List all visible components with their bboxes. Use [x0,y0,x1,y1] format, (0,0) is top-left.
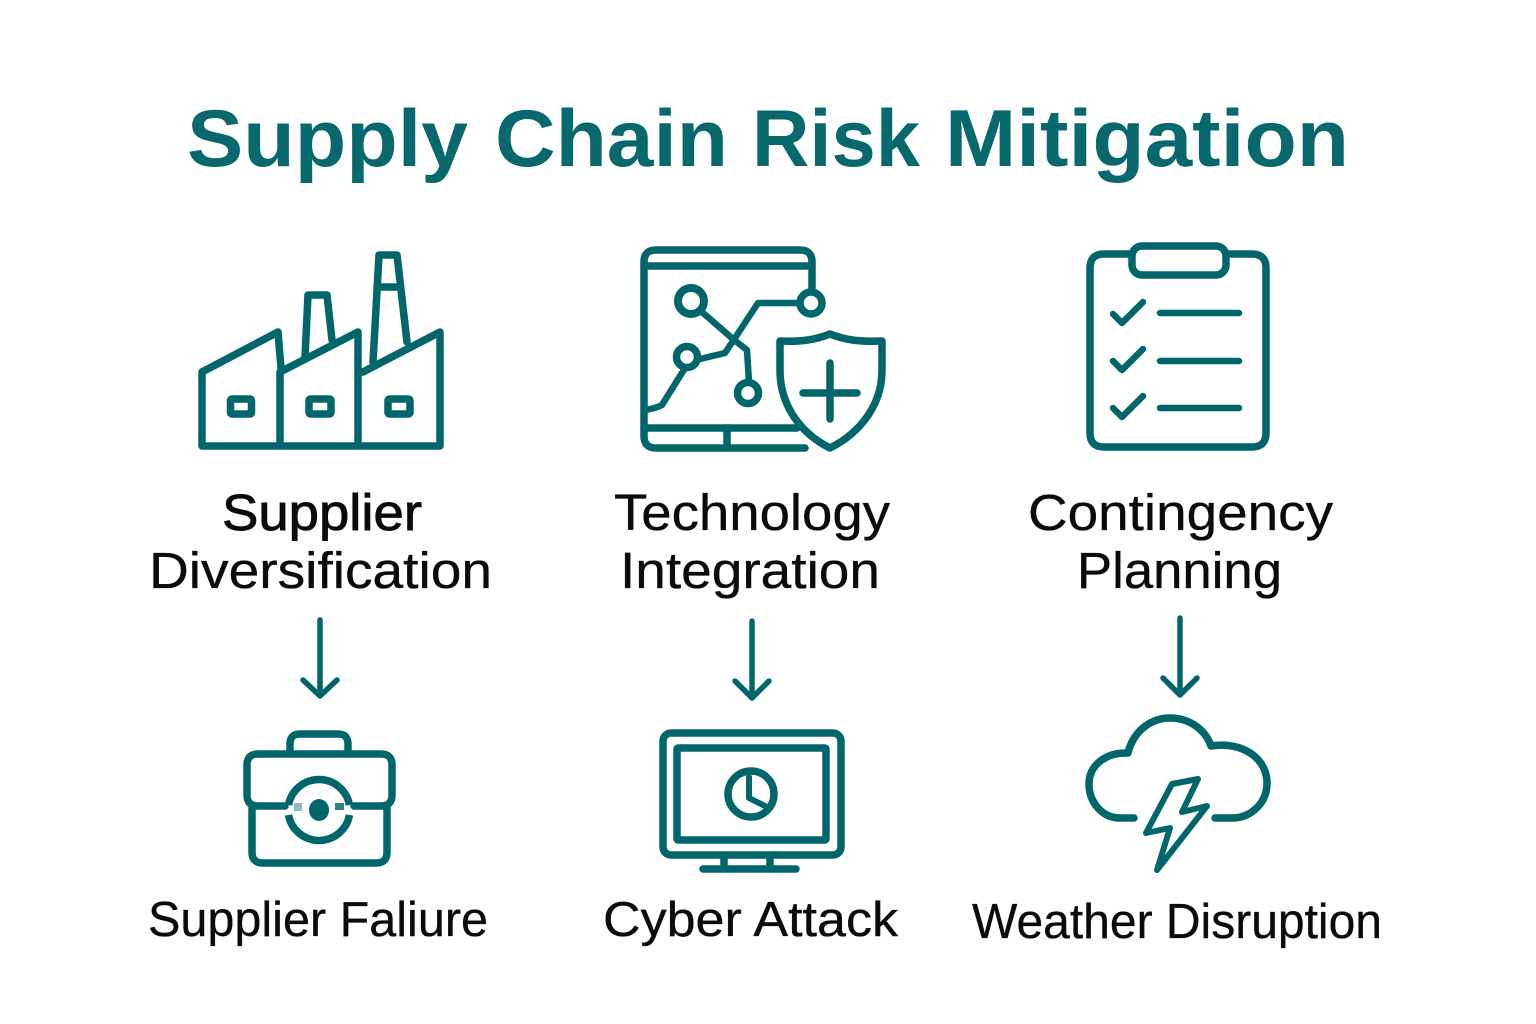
heading: contingency planning: Planning [1077,542,1282,599]
heading: supplier diversification: Diversification [149,542,492,599]
label: weather disruption: Weather Disruption [972,895,1382,949]
heading: contingency planning: Contingency [1028,484,1334,541]
icon: factory [202,255,440,446]
icon: storm cloud with lightning [1089,718,1267,870]
icon: clipboard checklist [1090,246,1266,447]
panel: supplier diversification [149,255,492,599]
panel: technology integration [614,250,904,599]
panel: supplier failure [148,734,488,947]
title: Risk [752,94,921,184]
panel: weather disruption [972,718,1382,949]
panel: cyber attack [603,733,899,947]
icon: monitor with clock [663,733,841,869]
arrow: contingency to weather [1163,618,1197,695]
heading: supplier diversification: Supplier [222,484,422,541]
arrow: technology to cyber attack [735,621,769,698]
heading: technology integration: Integration [620,542,880,599]
title: Chain [495,94,728,184]
title: Mitigation [945,94,1349,184]
heading: technology integration: Technology [614,484,891,541]
panel: contingency planning [1028,246,1347,599]
icon: network monitor with shield [644,250,882,448]
arrow: diversification to failure [303,620,337,696]
label: supplier failure: Supplier Faliure [148,893,488,947]
icon: briefcase [247,734,392,863]
label: cyber attack: Cyber Attack [603,893,899,947]
title: Supply [187,94,468,184]
